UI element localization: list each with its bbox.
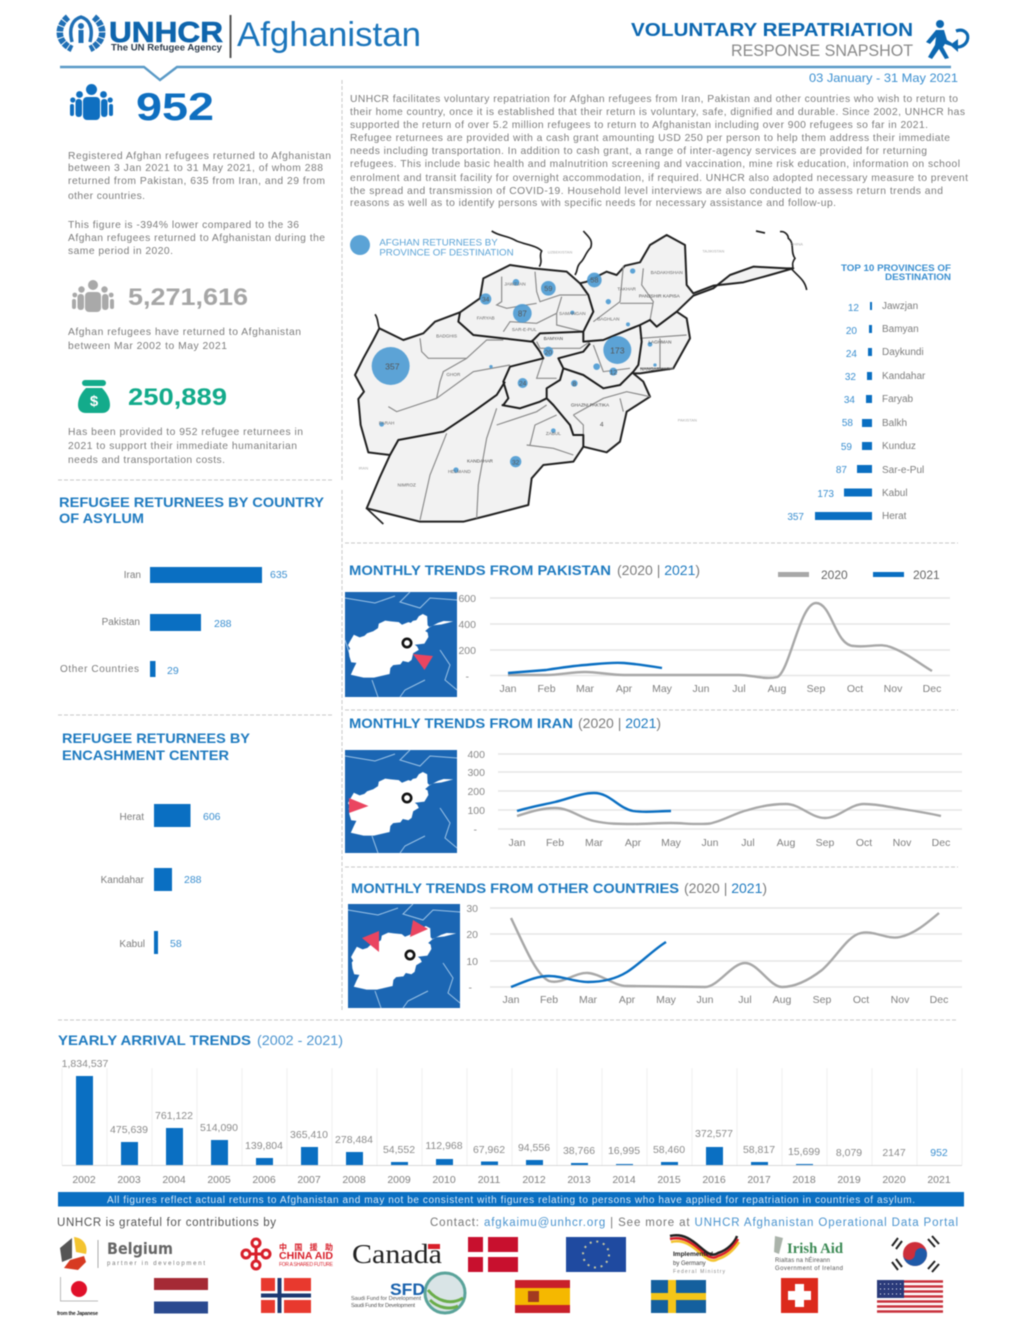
column chart: 278,484 [335,1134,373,1146]
heading [62,730,251,763]
panel: intro description: their home country, once it is established that their return is voluntary, safe, dignified and durable. Since 2002, UNHCR has [350,107,965,118]
line chart: Apr [616,683,633,695]
map: place names: IRAN [359,466,368,471]
map: bubble values: 173 [610,345,625,355]
column chart: 2004 [162,1174,186,1186]
column chart: 1,834,537 [62,1058,109,1070]
heading: MONTHLY TRENDS FROM PAKISTAN [349,562,611,578]
bar chart: 357 [787,512,804,523]
heading: MONTHLY TRENDS FROM IRAN [349,715,573,731]
bar chart: Sar-e-Pul [882,465,924,476]
description text: This figure is -394% lower compared to the 36 [68,220,299,231]
line chart: Sep [816,837,834,849]
column chart: 16,995 [608,1145,640,1157]
column chart: 2018 [792,1174,816,1186]
contributions note: UNHCR is grateful for contributions by [57,1217,276,1229]
line chart: - [474,824,478,836]
column chart: 2005 [207,1174,231,1186]
panel: key figure 952 [68,84,331,257]
logo wordmark: The UN Refugee Agency [111,42,222,52]
bar chart: 20 [846,326,857,337]
map: bubble values: 58 [590,276,598,285]
flag: Denmark [468,1237,518,1272]
heading: YEARLY ARRIVAL TRENDS [58,1032,251,1048]
map: bubble values: 20 [545,349,552,356]
line chart: 10 [466,956,478,968]
big number: 952 [136,86,214,129]
bar chart: Kabul [119,939,145,950]
map: place names: NIMROZ [397,483,416,488]
line chart: Sep [807,683,825,695]
panel: cash grant figure: Has been provided to 952 refugee returnees in [68,427,303,438]
map: place names: JAWZJAN [504,282,526,287]
logo: Saudi Fund for Development: Saudi Fund for Development [351,1303,415,1309]
footnote band [58,1192,964,1206]
panel: monthly trends from other countries [348,880,962,1008]
panel: top 10 provinces of destination [787,263,952,523]
logo wordmark: UNHCR [109,17,223,49]
logo: Japan: from the Japanese [57,1311,98,1317]
icon: locator map Pakistan [345,592,457,697]
flag: Sweden [651,1280,706,1313]
line chart: Jul [741,837,755,849]
logo: Germany [670,1235,739,1275]
header: UNHCR logo and country title [60,15,421,58]
logo: China Aid: 中国援助 [279,1242,333,1252]
heading: ENCASHMENT CENTER [62,747,229,763]
line chart: May [652,683,673,695]
column chart: 2009 [387,1174,411,1186]
map: place names: BAGHLAN [597,317,619,322]
line chart: Nov [884,683,903,695]
heading [58,1032,343,1048]
logo: Germany: by Germany [673,1261,706,1267]
description text: returned from Pakistan, 635 from Iran, and 29 from [68,176,325,187]
map: province borders [388,266,687,520]
line chart: Sep [813,994,831,1006]
line chart: Apr [619,994,636,1006]
map legend [350,235,514,257]
bar chart: 34 [844,395,855,406]
line chart: Aug [768,683,786,695]
line chart [466,903,962,1006]
line chart: Feb [537,683,556,695]
bar chart: Herat [120,812,144,823]
column chart: 67,962 [473,1144,505,1156]
donor logos [57,1235,943,1317]
icon: grey group of people [72,280,114,312]
panel: cash grant figure: 2021 to support their immediate humanitarian [68,441,297,452]
map: place names: ZABUL [546,431,561,436]
description text: Afghan refugees returned to Afghanistan during the [68,233,325,244]
logo: China Aid: CHINA AID [279,1251,333,1262]
bar chart: 58 [842,418,853,429]
map: place names: LAGHMAN [648,339,672,344]
bar chart: Kabul [882,488,908,499]
line chart: 200 [467,786,485,798]
heading [59,494,325,526]
logo: Belgium: partner in development [107,1261,205,1267]
line chart: 100 [467,805,485,817]
panel: intro description: supported the return of over 5.2 million refugees to return to Afghanistan including over 900 refugees so far in 2021. [350,120,928,131]
logo: China Aid: FOR A SHARED FUTURE [279,1262,334,1268]
column chart: 15,699 [788,1146,820,1158]
bar chart: Kandahar [101,875,145,886]
line chart: Jan [503,994,520,1006]
logo: Germany: Federal Ministry [673,1269,726,1275]
line chart: Jul [738,994,752,1006]
column chart: 2015 [657,1174,681,1186]
line chart: 400 [458,619,476,631]
column chart [62,1058,962,1186]
line chart: - [466,671,470,683]
heading: MONTHLY TRENDS FROM OTHER COUNTRIES [351,880,679,896]
description text: between 3 Jan 2021 to 31 May 2021, of whom 288 [68,163,323,174]
heading: OF ASYLUM [59,510,144,526]
description text: same period in 2020. [68,246,173,257]
column chart: 2147 [882,1147,906,1159]
header: report title [631,20,913,60]
date range: 03 January - 31 May 2021 [809,71,958,85]
column chart: 761,122 [155,1110,193,1122]
line chart: Oct [853,994,869,1006]
map: place names: PANJSHIR KAPISA [639,293,681,298]
bar chart: 606 [203,811,221,823]
column chart: 2017 [747,1174,771,1186]
panel: total returns figure: Afghan refugees have returned to Afghanistan [68,327,301,338]
map: place names: UZBEKISTAN [548,249,572,254]
map: region borders [390,283,677,455]
flag: Netherlands [154,1278,208,1314]
column chart: 2021 [927,1174,951,1186]
line chart: Mar [576,683,595,695]
line chart: 600 [458,593,476,605]
line chart: 20 [466,929,478,941]
heading: TOP 10 PROVINCES OF [841,263,952,273]
panel: intro description: refugees. This include basic health and malnutrition screening and vaccination, mine risk education, information on school [350,159,960,170]
map: bubble values: 87 [518,309,527,318]
bar chart [787,301,926,523]
line chart: Feb [546,837,564,849]
panel: intro description: UNHCR facilitates voluntary repatriation for Afghan refugees from Iran, Pakistan and other countries who wish to return to [350,94,958,105]
column chart: 2020 [882,1174,906,1186]
map: bubble values: 24 [519,381,527,388]
panel: intro description: needs including transportation. In addition to cash grant, a range of inter-agency services are provided for returning [350,146,927,157]
map: place names: GHOR [446,372,461,377]
header: report title: VOLUNTARY REPATRIATION [631,20,913,40]
map: bubble values: 8 [572,381,576,388]
logo: Irish Aid [774,1236,844,1272]
map: place names [359,242,803,488]
panel: total returns figure: 5,271,616 [128,284,248,311]
line chart [458,593,950,695]
column chart: 475,639 [110,1124,148,1136]
map legend: AFGHAN RETURNEES BY [379,237,498,247]
map: place names: BAMYAN [544,336,563,341]
panel: intro description: reasons as well as to identify persons with specific needs for necessary assistance and follow-up. [350,198,836,209]
bar chart: 24 [846,349,857,360]
neighbouring borders [367,231,807,524]
map: bubble values: 4 [600,422,604,429]
bar chart: 635 [270,569,288,581]
line chart [467,749,962,849]
column chart: 8,079 [836,1147,862,1159]
column chart: 2016 [702,1174,726,1186]
map: bubble values: 34 [482,297,490,304]
icon: UNHCR emblem [60,17,102,49]
line chart: Dec [932,837,950,849]
heading: DESTINATION [885,272,951,282]
column chart: 2007 [297,1174,321,1186]
heading: REFUGEE RETURNEES BY COUNTRY [59,494,325,510]
line chart: Dec [923,683,941,695]
line chart: May [656,994,677,1006]
flag: United States [877,1280,943,1313]
column chart: 2003 [117,1174,141,1186]
panel: intro description [350,94,968,209]
line chart: Oct [856,837,872,849]
map: place names: SAMANGAN [559,311,586,316]
icon: money bag [78,380,110,413]
logo: Saudi Fund for Development: SFD [390,1280,425,1299]
bar chart: Daykundi [882,347,924,358]
bar chart: 288 [214,618,232,630]
line chart: 30 [466,903,478,915]
column chart: 94,556 [518,1142,550,1154]
map: bubble values: 12 [610,369,617,376]
bar chart: Balkh [882,418,907,429]
line chart: 300 [467,767,485,779]
map: bubble values: 59 [544,284,552,293]
panel: cash grant figure: needs and transportation costs. [68,455,225,466]
map: place names: TAKHAR [617,286,637,291]
bar chart [101,804,221,954]
bar chart: 288 [184,874,202,886]
map: place names: HELMAND [448,469,471,474]
map: place names: BADGHIS [436,333,457,338]
bar chart: Iran [124,570,141,581]
flag: Norway [261,1278,311,1313]
bar chart: 32 [845,372,856,383]
logo: Irish Aid: Government of Ireland [775,1266,843,1272]
line chart: May [661,837,682,849]
map: bubble values [385,276,625,466]
bar chart [60,567,288,677]
logo: China Aid [242,1239,334,1269]
legend: 2020 [821,568,848,582]
map legend: PROVINCE OF DESTINATION [379,247,514,257]
logo: Irish Aid: Irish Aid [787,1241,844,1257]
bar chart: 58 [170,938,182,950]
column chart: 2014 [612,1174,636,1186]
heading: (2020 | 2021) [617,562,700,578]
icon: group of people [70,84,113,120]
map: place names: GHAZNI PAKTIKA [571,403,610,408]
logo: Germany: Implemented [673,1251,713,1258]
flag: European Union [566,1237,626,1272]
icon: walking person with return arrow [926,20,968,59]
map: place names: FARAH [379,420,394,425]
line chart: Jun [702,837,719,849]
bar chart: Herat [882,511,907,522]
column chart: 2010 [432,1174,456,1186]
description text: other countries. [68,191,145,202]
map: place names: CHINA [790,242,803,247]
panel: monthly trends from Pakistan [345,562,950,697]
line chart: 200 [458,645,476,657]
logo: Japan [57,1277,98,1317]
flag: Switzerland [781,1278,818,1313]
column chart: 2013 [567,1174,591,1186]
line chart: Aug [777,837,795,849]
panel: returnees by country of asylum [59,494,325,677]
icon: locator map other countries [348,904,460,1008]
map: place names: BADAKHSHAN [651,270,683,275]
flag: South Korea [892,1236,939,1272]
logo: Saudi Fund for Development: Saudi Fund for Development [351,1296,421,1302]
bar chart: Bamyan [882,324,919,335]
column chart: 952 [930,1147,948,1159]
icon: money bag: $ [90,393,99,410]
map: bubble values: 32 [512,459,520,466]
logo: Belgium [60,1237,205,1270]
column chart: 365,410 [290,1129,328,1141]
header divider with chevron [60,67,951,80]
panel: monthly trends from Iran [345,715,962,853]
column chart: 372,577 [695,1128,733,1140]
footnote band: All figures reflect actual returns to Afghanistan and may not be consistent with figures relating to persons who have applied for repatriation in countries of asylum. [107,1195,915,1206]
bar chart: 29 [167,665,179,677]
panel: map of returnees by province [350,231,807,524]
heading: (2020 | 2021) [684,880,767,896]
heading: (2020 | 2021) [578,715,661,731]
column chart: 2002 [72,1174,96,1186]
bar chart: Other Countries [60,664,139,675]
column chart: 2006 [252,1174,276,1186]
map: country shape [355,235,793,522]
column chart: 2008 [342,1174,366,1186]
bar chart: Pakistan [102,617,140,628]
panel: cash grant figure [68,380,303,466]
description text [68,151,331,257]
line chart: Oct [847,683,863,695]
line chart: Nov [891,994,910,1006]
line chart: Mar [579,994,598,1006]
bar chart: Kandahar [882,371,926,382]
panel: total returns figure: between Mar 2002 to May 2021 [68,341,227,352]
line chart: - [468,982,472,994]
map: place names: SAR-E-PUL [512,327,537,332]
column chart: 54,552 [383,1144,415,1156]
line chart: Dec [930,994,948,1006]
line chart: Mar [585,837,604,849]
line chart: 400 [467,749,485,761]
panel: returnees by encashment center [62,730,251,954]
column chart: 112,968 [425,1140,463,1152]
icon: locator map Iran [345,750,457,853]
column chart: 58,460 [653,1144,685,1156]
line chart: Apr [625,837,642,849]
panel: total returns figure [68,280,301,352]
line chart: Jan [500,683,517,695]
column chart: 38,766 [563,1145,595,1157]
column chart: 2012 [522,1174,546,1186]
line chart: Feb [540,994,558,1006]
bar chart: Faryab [882,394,914,405]
logo: Belgium: Belgium [107,1239,173,1258]
bar chart: Kunduz [882,441,916,452]
map: place names: KANDAHAR [467,459,494,464]
column chart: 514,090 [200,1122,238,1134]
bar chart: 59 [841,442,852,453]
legend: 2021 [913,568,940,582]
bar chart: 87 [836,465,847,476]
panel: intro description: enrolment and transit facility for overnight accommodation, if required. UNHCR also adopted necessary measure to prevent [350,173,968,184]
map: place names: TAJIKISTAN [702,248,724,253]
map: place names: PAKISTAN [678,417,697,422]
panel: intro description: the spread and transmission of COVID-19. Household level interviews are also conducted to assess return trends and [350,186,943,197]
heading [841,263,952,282]
map: returnee bubbles [372,268,657,473]
panel: intro description: Refugee returnees are provided with a cash grant amounting USD 250 per person to help them address their immediate [350,133,950,144]
bar chart: 173 [817,489,834,500]
description text: Registered Afghan refugees returned to Afghanistan [68,151,331,162]
line chart: Jun [693,683,710,695]
line chart: Aug [773,994,791,1006]
line chart: Nov [893,837,912,849]
heading: REFUGEE RETURNEES BY [62,730,251,746]
page title: Afghanistan [237,16,421,54]
column chart: 2019 [837,1174,861,1186]
line chart: Jul [732,683,746,695]
flag: Spain [515,1280,570,1313]
column chart: 2011 [478,1174,500,1186]
logo: Irish Aid: Rialtas na hÉireann [775,1257,830,1264]
heading: (2002 - 2021) [257,1033,343,1048]
map: place names: FARYAB [477,315,495,320]
map: place names: NANGARHAR [640,366,671,371]
bar chart: Jawzjan [882,301,918,312]
heading [349,715,661,731]
column chart: 58,817 [743,1144,775,1156]
line chart: Jan [509,837,526,849]
logo: Canada: Canada [352,1239,442,1269]
column chart: 139,804 [245,1140,283,1152]
contact line: Contact: afgkaimu@unhcr.org | See more at UNHCR Afghanistan Operational Data Portal [430,1217,958,1229]
legend [778,568,940,582]
bar chart: 12 [848,303,859,314]
panel: cash grant figure: 250,889 [128,384,227,411]
panel: yearly arrival trends [58,1032,962,1186]
logo: Saudi Fund for Development [351,1273,465,1313]
map: bubble values: 357 [385,362,400,372]
line chart: Jun [697,994,714,1006]
header: report title: RESPONSE SNAPSHOT [731,42,913,60]
